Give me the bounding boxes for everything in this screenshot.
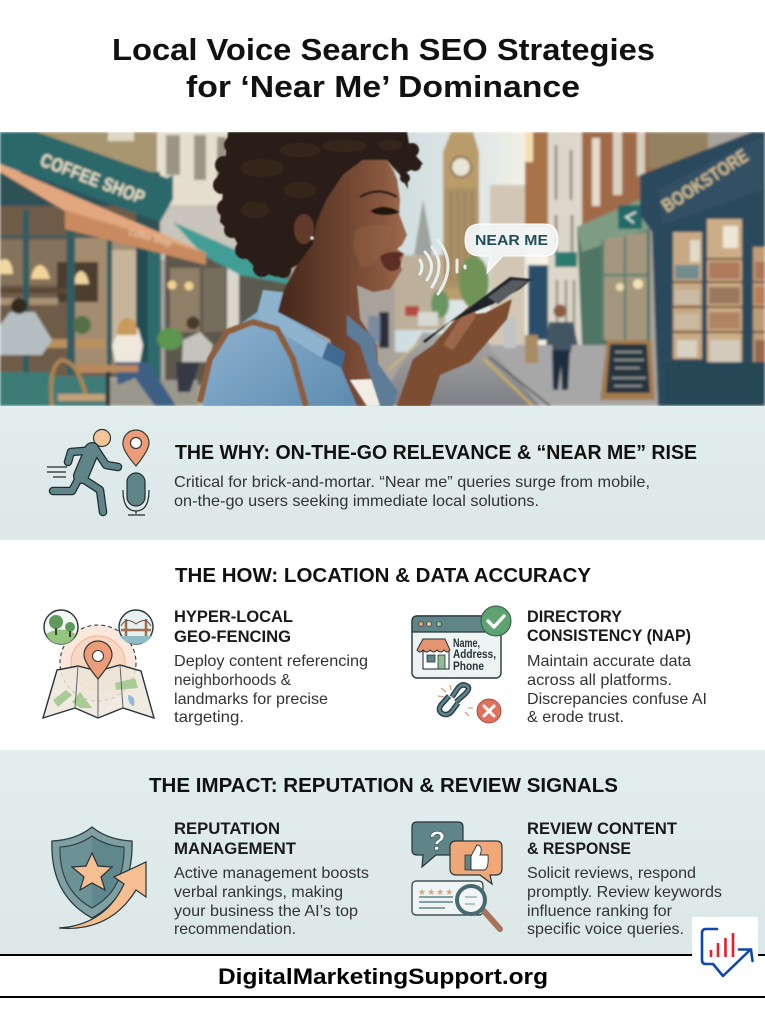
card: geo-fencing: HYPER-LOCAL <box>174 607 293 626</box>
card: review content: REVIEW CONTENT <box>527 819 678 838</box>
icon: geo-fenced map <box>43 610 154 718</box>
heading: the why: THE WHY: ON-THE-GO RELEVANCE & “NEAR ME” RISE <box>175 442 697 464</box>
card: review content: specific voice queries. <box>527 921 684 938</box>
street background: Coffee Shop <box>127 227 173 248</box>
mid-street right buildings <box>525 132 550 227</box>
text: the why <box>174 474 650 510</box>
title: for ‘Near Me’ Dominance <box>186 69 580 104</box>
card: geo-fencing: targeting. <box>174 709 244 726</box>
card: geo-fencing: landmarks for precise <box>174 691 328 708</box>
bag strap <box>200 322 306 406</box>
card: review content <box>527 819 722 938</box>
brick building <box>582 132 658 227</box>
card: geo-fencing: GEO-FENCING <box>174 627 291 646</box>
chalkboard sign <box>600 340 655 400</box>
card: reputation management: verbal rankings, making <box>174 884 343 901</box>
card: geo-fencing: neighborhoods & <box>174 672 291 689</box>
right-side pedestrians <box>368 304 578 390</box>
second shop <box>165 255 245 385</box>
distant low buildings and trees <box>413 200 434 256</box>
road and sidewalk <box>375 332 540 406</box>
card: reputation management: MANAGEMENT <box>174 839 297 858</box>
phone <box>423 277 532 343</box>
card: reputation management <box>174 819 369 938</box>
icon: directory listing and broken link <box>412 606 511 723</box>
icon: review bubbles and magnifier: ? <box>429 826 446 856</box>
near me speech bubble: NEAR ME <box>475 232 548 249</box>
card: directory consistency: Maintain accurate data <box>527 653 691 670</box>
text: the why: on-the-go users seeking immediate local solutions. <box>174 493 539 510</box>
lips <box>380 252 404 271</box>
icon: review bubbles and magnifier: ★★★★ <box>418 887 454 897</box>
icon: runner, pin and microphone <box>47 430 149 515</box>
card: directory consistency <box>527 607 707 726</box>
card: directory consistency: CONSISTENCY (NAP) <box>527 626 691 645</box>
panel: the why <box>0 406 765 540</box>
card: geo-fencing <box>174 607 368 726</box>
card: directory consistency: & erode trust. <box>527 709 624 726</box>
sound waves <box>420 240 465 294</box>
card: review content: Solicit reviews, respond <box>527 865 696 882</box>
icon: directory listing and broken link: Name, <box>453 638 480 650</box>
coffee shop interior <box>0 172 160 377</box>
title <box>112 32 655 104</box>
card: directory consistency: across all platforms. <box>527 672 672 689</box>
cafe patrons and furniture <box>0 298 213 406</box>
street background: COFFEE SHOP <box>37 150 148 209</box>
panel: the impact <box>0 750 765 955</box>
front fingers <box>486 300 510 314</box>
bookstore <box>640 132 765 406</box>
card: review content: influence ranking for <box>527 903 673 920</box>
card: reputation management: REPUTATION <box>174 819 280 838</box>
card: reputation management: recommendation. <box>174 921 296 938</box>
woman <box>200 132 532 406</box>
hair <box>213 132 423 278</box>
eye and brow <box>370 207 400 215</box>
hero photo: woman voice searching on a city street <box>0 132 765 406</box>
icon: directory listing and broken link: Phone <box>453 661 484 673</box>
green shop <box>576 228 652 346</box>
left upper buildings <box>38 132 158 174</box>
icon: shield with star and rising arrow <box>52 827 146 928</box>
icon: directory listing and broken link: Address, <box>453 649 496 661</box>
footer bar: DigitalMarketingSupport.org <box>218 964 548 989</box>
denim shirt <box>203 290 357 406</box>
title: Local Voice Search SEO Strategies <box>112 32 655 67</box>
card: reputation management: Active management boosts <box>174 865 369 882</box>
near me speech bubble <box>465 224 558 273</box>
street background <box>0 132 765 406</box>
card: directory consistency: Discrepancies confuse AI <box>527 691 707 708</box>
text: the why: Critical for brick-and-mortar. “Near me” queries surge from mobile, <box>174 474 650 491</box>
card: geo-fencing: Deploy content referencing <box>174 653 368 670</box>
hand <box>397 299 512 406</box>
card: directory consistency: DIRECTORY <box>527 607 623 626</box>
white top <box>349 378 381 406</box>
heading: the impact: THE IMPACT: REPUTATION & REVIEW SIGNALS <box>149 775 618 797</box>
panel: the how <box>0 540 765 750</box>
heading: the how: THE HOW: LOCATION & DATA ACCURACY <box>175 565 592 587</box>
card: review content: & RESPONSE <box>527 839 631 858</box>
sign and awning <box>0 132 173 222</box>
card: reputation management: your business the AI’s top <box>174 903 358 920</box>
ear <box>294 214 314 244</box>
icon: review bubbles and magnifier <box>412 822 502 929</box>
logo: chart in speech bubble <box>692 917 758 976</box>
card: review content: promptly. Review keywords <box>527 884 722 901</box>
Big Ben tower <box>443 132 479 300</box>
neck, face and chest <box>278 160 407 406</box>
